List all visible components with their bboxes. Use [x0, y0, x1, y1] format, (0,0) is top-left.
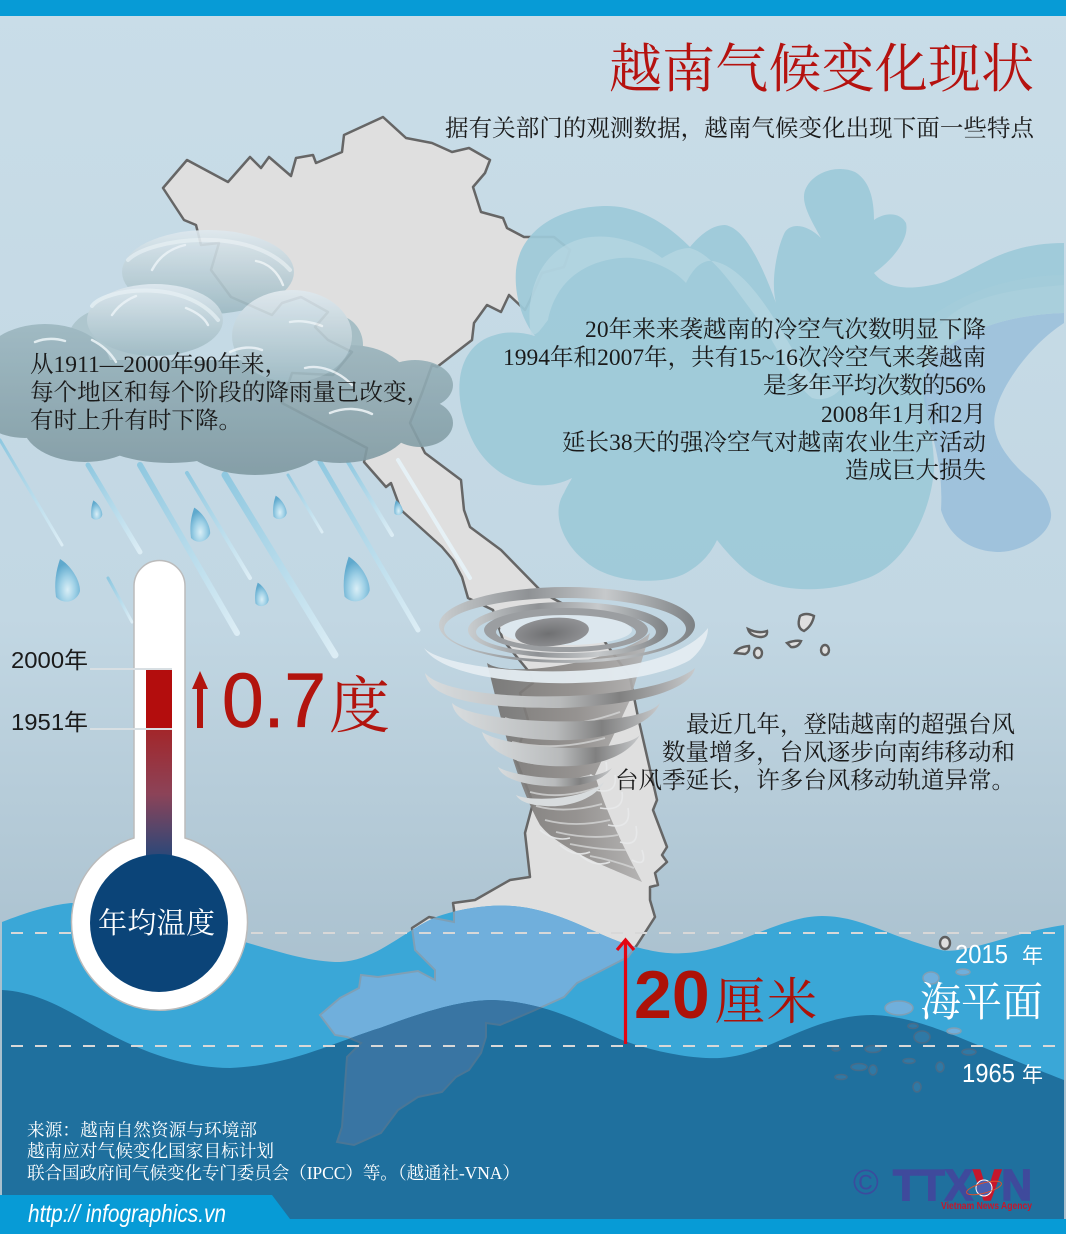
tail curls [540, 762, 644, 864]
sea rise value: 20 [634, 957, 710, 1033]
map of Vietnam [163, 117, 667, 1145]
subtitle: 据有关部门的观测数据，越南气候变化出现下面一些特点 [445, 115, 1034, 142]
tornado rings [439, 587, 695, 663]
cold air text: 2008年1月和2月 [821, 401, 986, 428]
copyright mark: © [853, 1163, 879, 1202]
label 1951: 1951年 [11, 709, 88, 735]
label 2015: 2015 [955, 939, 1008, 969]
label 1965: 年 [1022, 1064, 1043, 1087]
tornado funnel [487, 633, 650, 882]
cold air text: 是多年平均次数的56% [763, 372, 986, 399]
thermometer [71, 560, 247, 1010]
thermometer body [71, 560, 247, 1010]
tornado arcs [424, 628, 708, 806]
sea level dashed lines [11, 933, 1064, 1046]
cold air text [503, 316, 986, 484]
logo orbit [965, 1179, 1003, 1197]
rainfall text: 每个地区和每个阶段的降雨量已改变， [30, 379, 430, 406]
temperature value: 度 [329, 674, 390, 741]
label 2015 [955, 939, 1043, 969]
logo tagline: Vietnam News Agency [941, 1200, 1032, 1212]
rain cloud [0, 230, 453, 475]
temperature value [222, 658, 390, 744]
sea level label: 海平面 [920, 979, 1043, 1025]
tornado eye [514, 615, 590, 649]
label 2000: 2000年 [11, 647, 88, 673]
top bar [0, 0, 1066, 16]
swirl light band [529, 236, 843, 399]
source text: 越南应对气候变化国家目标计划 [27, 1141, 274, 1161]
logo globe [976, 1180, 992, 1196]
cold air text: 造成巨大损失 [845, 457, 986, 484]
temperature value: 0.7 [222, 658, 326, 744]
source text: 来源：越南自然资源与环境部 [27, 1120, 257, 1140]
typhoon text: 最近几年，登陆越南的超强台风 [686, 711, 1015, 738]
rain drops [55, 496, 403, 606]
source text [27, 1120, 520, 1183]
tornado ribs [505, 712, 634, 868]
rainfall text: 从1911—2000年90年来， [30, 351, 288, 378]
typhoon text: 台风季延长，许多台风移动轨道异常。 [615, 767, 1015, 794]
year ticks [90, 669, 172, 729]
title: 越南气候变化现状 [609, 41, 1034, 99]
bottom bar [0, 1195, 1066, 1234]
thermometer bulb [90, 854, 228, 992]
tornado [424, 587, 708, 882]
cold air text: 延长38天的强冷空气对越南农业生产活动 [562, 429, 986, 456]
sea rise arrow [617, 940, 634, 1044]
rainfall text: 有时上升有时下降。 [30, 407, 242, 434]
cold air swirl [459, 169, 1064, 589]
typhoon text [615, 711, 1015, 794]
spratly islands [832, 937, 976, 1092]
cold air text: 20年来来袭越南的冷空气次数明显下降 [585, 316, 986, 343]
cloud highlights [35, 240, 372, 414]
rain streaks [0, 440, 470, 655]
bulb label: 年均温度 [98, 907, 215, 940]
sea rise value [634, 957, 817, 1033]
website url: http:// infographics.vn [28, 1200, 226, 1228]
rainfall text [30, 351, 430, 434]
swirl blue ribbon [923, 313, 1064, 552]
sea rise value: 厘米 [715, 974, 817, 1030]
source text: 联合国政府间气候变化专门委员会（IPCC）等。（越通社-VNA） [27, 1163, 520, 1183]
swirl teal band [921, 275, 1064, 370]
cold air text: 1994年和2007年，共有15~16次冷空气来袭越南 [503, 344, 986, 371]
paracel islands [735, 614, 829, 658]
typhoon text: 数量增多，台风逐步向南纬移动和 [662, 739, 1015, 766]
mercury fade [146, 729, 172, 859]
temperature up arrow [192, 671, 208, 728]
TTXVN logo: TTXVN [893, 1161, 1032, 1210]
sea level waves [2, 903, 1064, 1219]
label 1965: 1965 [962, 1058, 1015, 1088]
label 2015: 年 [1022, 945, 1043, 968]
mercury red [146, 670, 172, 729]
